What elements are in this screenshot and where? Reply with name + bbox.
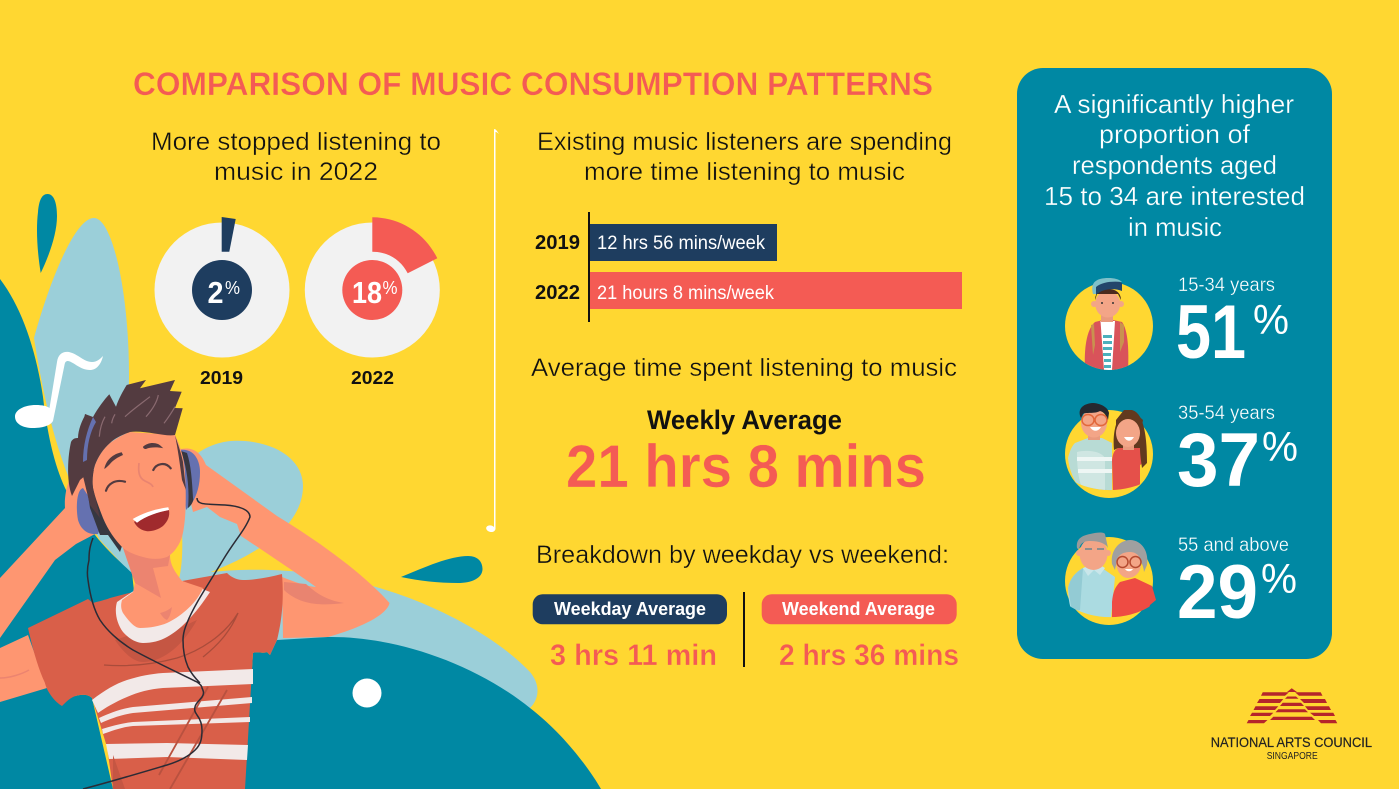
icon: senior couple (1065, 532, 1156, 628)
mouth (134, 510, 169, 531)
value: 51%: 51 (1176, 290, 1246, 375)
earphone cable (83, 498, 250, 789)
headphones right cup (180, 450, 200, 510)
heading: existing listeners (537, 128, 952, 186)
value: 29%: 29 (1177, 550, 1258, 635)
panel heading: 15 to 34 are interested (1044, 181, 1305, 211)
back hair lobe (68, 414, 92, 496)
heading: stopped listening (151, 128, 441, 186)
logo subtitle: SINGAPORE (1267, 751, 1318, 762)
label: 15-34 years: 15-34 years (1178, 275, 1275, 296)
heading: stopped listening: music in 2022 (214, 158, 378, 186)
value: 51%: % (1253, 296, 1289, 343)
eyebrows (104, 443, 163, 469)
weekday value: 3 hrs 11 min (550, 639, 717, 672)
heading: average time: Average time spent listening to music (531, 354, 957, 382)
donut chart 2019: 2 (208, 275, 224, 310)
value: 37%: 37 (1177, 418, 1260, 503)
donut chart 2019: 2019 (200, 367, 243, 388)
left arm (0, 472, 95, 638)
illustration: man listening to music (0, 194, 601, 789)
panel heading: respondents aged (1072, 150, 1277, 180)
pill: weekend average (762, 594, 957, 624)
icon: adult couple (1065, 403, 1153, 500)
pale blue blob behind head (178, 441, 303, 583)
heading: breakdown: Breakdown by weekday vs weekend: (536, 541, 949, 569)
hair highlights (99, 395, 175, 437)
shirt fold lines (104, 613, 238, 666)
music note (15, 352, 103, 428)
white dot (352, 678, 382, 708)
pill: weekend average: Weekend Average (782, 598, 935, 619)
donut chart 2019: % (225, 278, 240, 298)
headphones left cup (77, 488, 104, 534)
neck shadow (123, 548, 170, 598)
shirt collar (116, 581, 210, 643)
teal shape bottom (244, 637, 601, 789)
pill: weekday average (533, 594, 727, 624)
logo: National Arts Council (1211, 688, 1372, 762)
bar chart: 21 hours 8 mins/week (597, 283, 774, 304)
panel: time spent (531, 128, 962, 672)
heading: existing listeners: Existing music listeners are spending (537, 128, 952, 156)
donut chart 2019 (154, 217, 290, 388)
pill: weekday average: Weekday Average (554, 598, 706, 619)
weekly average label: Weekly Average (647, 405, 842, 435)
panel heading: in music (1128, 212, 1222, 242)
divider: music note line (486, 129, 499, 532)
panel: stopped listening (151, 128, 441, 388)
teal droplet right (401, 556, 482, 583)
right arm (178, 449, 390, 638)
headband purple stripe (83, 417, 96, 462)
logo wordmark: NATIONAL ARTS COUNCIL (1211, 734, 1372, 750)
weekly average value: 21 hrs 8 mins (566, 433, 926, 500)
shirt lower shadows (159, 687, 227, 789)
hair (81, 380, 186, 518)
panel: age interest (1017, 68, 1332, 659)
value: 29%: % (1261, 555, 1297, 602)
panel heading (1044, 89, 1305, 242)
shirt stripes (92, 669, 253, 760)
bar chart (535, 212, 962, 322)
weekend value: 2 hrs 36 mins (779, 639, 959, 672)
face (93, 432, 186, 559)
label: 55 and above: 55 and above (1178, 535, 1289, 556)
shirt (28, 573, 283, 789)
panel heading: A significantly higher (1054, 89, 1294, 119)
teal shape left (0, 279, 135, 720)
headband and dark ear pads (84, 451, 193, 552)
panel heading: proportion of (1099, 119, 1251, 149)
neck (121, 548, 203, 628)
bar chart: 2022 (535, 282, 580, 304)
heading: stopped listening: More stopped listening to (151, 128, 441, 156)
arm shadow (284, 582, 344, 604)
value: 37% (1177, 418, 1298, 503)
teal droplet top (37, 194, 57, 273)
donut chart 2022: 2022 (351, 367, 394, 388)
value: 37%: % (1262, 423, 1298, 470)
pale blue blob bottom (180, 570, 538, 708)
pale blue leaf shape (34, 218, 135, 578)
donut chart 2022: 18 (352, 275, 382, 310)
icon: young person (1065, 278, 1153, 370)
closed eyes (106, 464, 171, 491)
label: 35-54 years: 35-54 years (1178, 403, 1275, 424)
bar chart: 2019 (535, 232, 580, 254)
heading: existing listeners: more time listening to music (584, 158, 905, 186)
donut chart 2022 (305, 217, 440, 388)
teal shape bottom left (0, 688, 113, 789)
nose (139, 463, 153, 487)
donut chart 2022: % (382, 278, 398, 298)
bar chart: 12 hrs 56 mins/week (597, 233, 765, 254)
shirt shadow under collar (115, 620, 197, 662)
title: COMPARISON OF MUSIC CONSUMPTION PATTERNS (133, 66, 933, 102)
logo mark (1247, 688, 1337, 723)
